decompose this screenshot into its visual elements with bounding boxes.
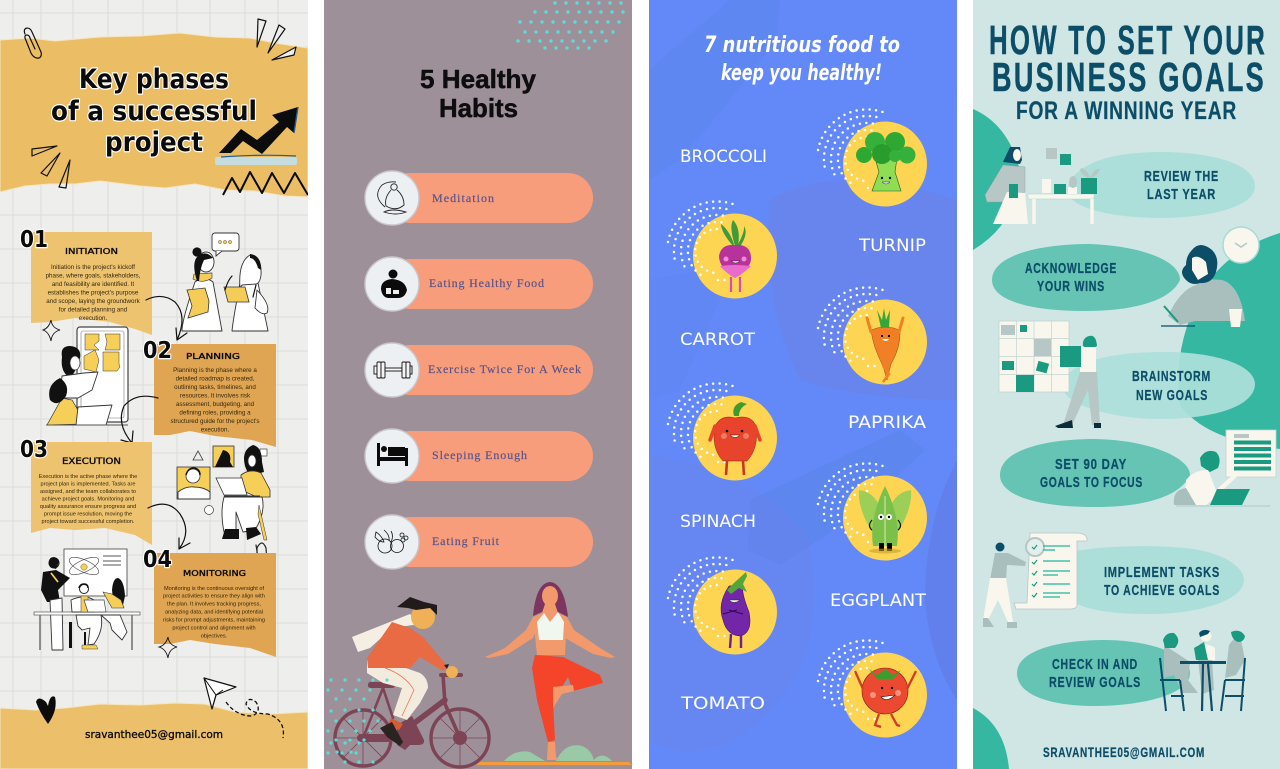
eggplant character xyxy=(668,557,777,654)
goal 6 check in and review goals: CHECK IN AND xyxy=(1052,656,1138,673)
title xyxy=(989,17,1267,125)
background teal shape right xyxy=(1178,233,1280,449)
header torn paper banner xyxy=(0,33,308,197)
phase 02 planning card: execution. xyxy=(201,426,230,434)
phase 03 execution card: quality assurance ensure progress and xyxy=(40,504,136,510)
icon: bed xyxy=(377,443,408,466)
phase 02 planning card: structured guide for the project's xyxy=(170,418,260,425)
panel: 5 healthy habits xyxy=(324,0,632,769)
phase 02 planning card: defining roles, providing a xyxy=(179,410,251,416)
illustration: person with checklist scroll xyxy=(983,533,1087,628)
phase 02 planning card: 02 xyxy=(143,338,172,364)
phase 01 initiation card: establishes the project's purpose xyxy=(48,290,139,296)
title: keep you healthy! xyxy=(721,61,882,86)
icon: paper plane with dashed trail xyxy=(204,678,283,738)
panel: key phases of a successful project xyxy=(0,0,308,769)
phase 02 planning card: assessment, budgeting, and xyxy=(176,401,255,408)
illustration: team in science meeting xyxy=(34,549,140,650)
title: of a successful xyxy=(51,96,257,127)
phase 04 monitoring card: project activities to ensure they align with xyxy=(163,594,265,600)
icon: burst left xyxy=(32,146,70,188)
illustration: woman writing with clock xyxy=(1161,227,1259,327)
phase 01 initiation card: INITIATION xyxy=(65,247,118,256)
phase 02 planning card: Planning is the phase where a xyxy=(173,367,257,374)
habit: sleeping xyxy=(365,429,593,483)
phase 02 planning card: detailed roadmap is created, xyxy=(176,376,255,382)
footer email: sravanthee05@gmail.com xyxy=(85,728,223,741)
phase 03 execution card: 03 xyxy=(20,437,48,463)
arrow: execution to monitoring xyxy=(148,504,190,549)
goal 3 brainstorm new goals: NEW GOALS xyxy=(1136,387,1208,404)
goal 5 implement tasks: TO ACHIEVE GOALS xyxy=(1104,582,1220,599)
icon: paperclip right xyxy=(255,542,267,553)
footer email: SRAVANTHEE05@GMAIL.COM xyxy=(1043,744,1205,760)
scarf xyxy=(352,614,420,652)
phase 03 execution card: prompt issue resolution, moving the xyxy=(44,512,132,518)
phase 02 planning card: outlining tasks, timelines, and xyxy=(174,384,256,391)
phase 01 initiation card: 01 xyxy=(20,227,48,253)
phase 02 planning card: resources. It involves risk xyxy=(180,392,251,400)
icon: paperclip top xyxy=(24,28,41,58)
label: carrot: CARROT xyxy=(680,330,756,350)
phase 03 execution card: project toward successful completion. xyxy=(42,519,135,525)
illustration: yoga woman xyxy=(476,582,632,765)
icon: zigzag scribble xyxy=(223,172,308,195)
label: eggplant: EGGPLANT xyxy=(830,591,927,611)
arrow: planning to execution xyxy=(121,396,158,443)
phase 03 execution card: project plan is implemented. Tasks are xyxy=(40,482,136,488)
arrow: initiation to planning xyxy=(146,296,187,340)
spinach character xyxy=(818,463,927,560)
phase 03 execution card: EXECUTION xyxy=(62,457,121,467)
background teal shape left xyxy=(973,109,1021,250)
title xyxy=(704,33,900,86)
icon: burst top right xyxy=(257,19,296,60)
goal 4 set 90 day goals to focus xyxy=(1000,439,1190,507)
illustration: two women talking xyxy=(182,233,268,331)
turnip character xyxy=(668,201,777,298)
tomato character xyxy=(818,640,927,738)
label: broccoli: BROCCOLI xyxy=(680,147,767,167)
goal 5 implement tasks xyxy=(1070,546,1244,614)
goal 4 set 90 day goals to focus: SET 90 DAY xyxy=(1055,456,1127,473)
title: project xyxy=(105,127,203,158)
habit: meditation: Meditation xyxy=(432,191,494,205)
habit: eating fruit: Eating Fruit xyxy=(432,534,500,548)
goal 2 acknowledge your wins xyxy=(992,244,1180,311)
phase 01 initiation card: Initiation is the project's kickoff xyxy=(51,264,135,271)
label: paprika: PAPRIKA xyxy=(848,413,926,433)
goal 1 review the last year: REVIEW THE xyxy=(1144,168,1219,185)
dots bottom left xyxy=(328,680,390,762)
phase 01 initiation card: and scope, laying the groundwork xyxy=(46,298,141,305)
icon: sparkle lower xyxy=(159,637,177,658)
dots top right xyxy=(518,3,630,48)
illustration: cyclist xyxy=(335,597,489,767)
title: Key phases xyxy=(79,64,229,95)
goal 5 implement tasks: IMPLEMENT TASKS xyxy=(1104,564,1220,581)
habit: exercise xyxy=(365,343,593,397)
background brush shapes xyxy=(649,0,957,751)
goal 2 acknowledge your wins: YOUR WINS xyxy=(1037,278,1105,295)
habit: eating fruit xyxy=(365,515,593,569)
goal 6 check in and review goals xyxy=(1017,640,1190,706)
goal 2 acknowledge your wins: ACKNOWLEDGE xyxy=(1025,260,1117,277)
icon: dumbbell xyxy=(374,362,412,378)
phase 01 initiation card: phase, where goals, stakeholders, xyxy=(46,272,141,280)
panel: 7 nutritious foods xyxy=(649,0,957,769)
habit: eating healthy food xyxy=(365,257,593,311)
icon: meditation xyxy=(378,182,406,214)
broccoli character xyxy=(818,109,927,206)
footer torn paper banner xyxy=(0,703,308,769)
goal 1 review the last year xyxy=(1068,152,1255,218)
habit: exercise: Exercise Twice For A Week xyxy=(428,362,581,376)
goal 3 brainstorm new goals xyxy=(1063,352,1255,419)
phase 02 planning card xyxy=(143,338,276,447)
phase 04 monitoring card: Monitoring is the continuous oversight of xyxy=(164,586,265,592)
label: tomato: TOMATO xyxy=(680,694,765,714)
goal 6 check in and review goals: REVIEW GOALS xyxy=(1049,674,1141,691)
illustration: planning board with puzzle pieces xyxy=(46,327,128,425)
phase 01 initiation card: for detailed planning and xyxy=(59,306,128,314)
icon: rising arrow xyxy=(215,107,298,165)
icon: food person xyxy=(381,270,407,298)
icon: fruit xyxy=(375,530,408,553)
phase 03 execution card xyxy=(20,437,152,545)
habit: eating healthy food: Eating Healthy Food xyxy=(429,276,544,290)
label: spinach: SPINACH xyxy=(680,512,756,532)
title: 5 Healthy xyxy=(420,64,537,94)
phase 02 planning card: PLANNING xyxy=(186,352,240,361)
habit: meditation xyxy=(365,171,593,225)
phase 04 monitoring card: risks for prompt adjustments, maintaining xyxy=(163,618,265,624)
illustration: woman at desk with coffee xyxy=(985,147,1100,224)
phase 04 monitoring card: objectives. xyxy=(201,634,228,640)
title xyxy=(420,68,536,118)
habit: sleeping: Sleeping Enough xyxy=(432,448,527,462)
phase 04 monitoring card: project control and alignment with xyxy=(172,626,256,632)
title xyxy=(51,64,257,158)
paprika character xyxy=(668,383,777,480)
phase 03 execution card: assigned, and the team collaborates to xyxy=(40,489,136,495)
goal 1 review the last year: LAST YEAR xyxy=(1147,186,1216,203)
phase 04 monitoring card xyxy=(143,547,276,657)
illustration: three friends at cafe table xyxy=(1160,630,1245,711)
phase 01 initiation card: execution. xyxy=(79,315,108,322)
label: turnip: TURNIP xyxy=(858,236,926,256)
illustration: woman at planning board xyxy=(999,321,1101,428)
phase 03 execution card: achieve project goals. Monitoring and xyxy=(42,496,134,502)
illustration: person at laptop with task list xyxy=(1174,430,1276,506)
icon: heart xyxy=(36,696,56,724)
phase 04 monitoring card: MONITORING xyxy=(183,569,246,578)
phase 03 execution card: Execution is the active phase where the xyxy=(39,474,137,480)
phase 04 monitoring card: analyzing data, and identifying potential xyxy=(165,610,263,616)
phase 01 initiation card xyxy=(20,227,152,335)
trousers xyxy=(367,660,428,720)
illustration: remote video meeting xyxy=(177,445,270,540)
goal 4 set 90 day goals to focus: GOALS TO FOCUS xyxy=(1040,474,1143,491)
phase 04 monitoring card: the plan. It involves tracking progress, xyxy=(167,602,261,608)
sweater xyxy=(367,622,448,671)
background teal shape bottom left xyxy=(973,708,1009,769)
goal 3 brainstorm new goals: BRAINSTORM xyxy=(1132,368,1211,385)
phase 01 initiation card: and feasibility are identified. It xyxy=(52,281,134,288)
panel: how to set your business goals xyxy=(973,0,1280,769)
icon: sparkle xyxy=(43,320,60,341)
title: Habits xyxy=(439,93,518,123)
title: 7 nutritious food to xyxy=(704,33,900,58)
carrot character xyxy=(818,287,927,384)
phase 04 monitoring card: 04 xyxy=(143,547,172,573)
